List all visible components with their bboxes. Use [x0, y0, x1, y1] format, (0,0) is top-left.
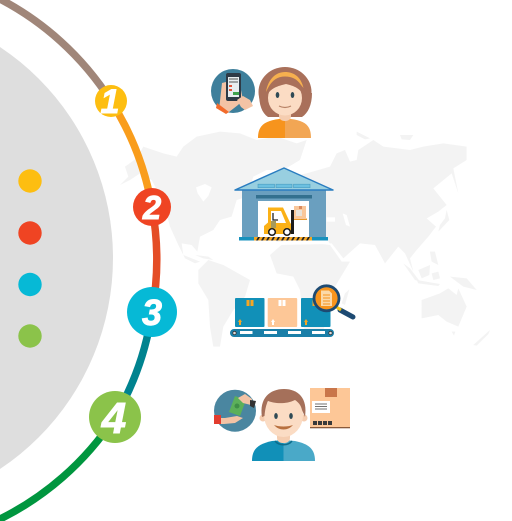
- icon: payment, man and delivered parcel: [214, 388, 350, 461]
- step 2 badge: [133, 188, 171, 226]
- icon: man customer: [252, 389, 315, 461]
- magnifier: [314, 286, 353, 317]
- icon: cash handover: [214, 390, 256, 432]
- grey semicircle panel: [0, 4, 113, 512]
- world map background: [120, 132, 490, 347]
- icon: woman customer: [258, 67, 312, 138]
- icon: phone order with customer: [211, 67, 312, 138]
- boxes: [235, 298, 330, 327]
- step 2 badge: 2: [142, 189, 162, 226]
- step 1 badge: 1: [101, 83, 119, 121]
- timeline arc: [0, 0, 157, 521]
- step 4 badge: 4: [101, 394, 126, 443]
- icon: parcels on conveyor with magnifier: [230, 286, 353, 337]
- conveyor belt: [230, 329, 334, 337]
- map: Africa, Eurasia and Oceania: [270, 132, 490, 346]
- icon: warehouse with forklift: [235, 168, 333, 240]
- legend dots: [18, 169, 42, 348]
- icon: hand holding phone: [211, 69, 255, 114]
- step 3 badge: 3: [142, 292, 162, 333]
- map: Americas: [120, 132, 307, 347]
- hazard strip: [254, 237, 312, 240]
- icon: parcel: [310, 388, 350, 428]
- step 4 badge: [89, 391, 141, 443]
- step 1 badge: [95, 83, 127, 121]
- step 3 badge: [127, 287, 177, 337]
- icon: forklift: [264, 206, 307, 235]
